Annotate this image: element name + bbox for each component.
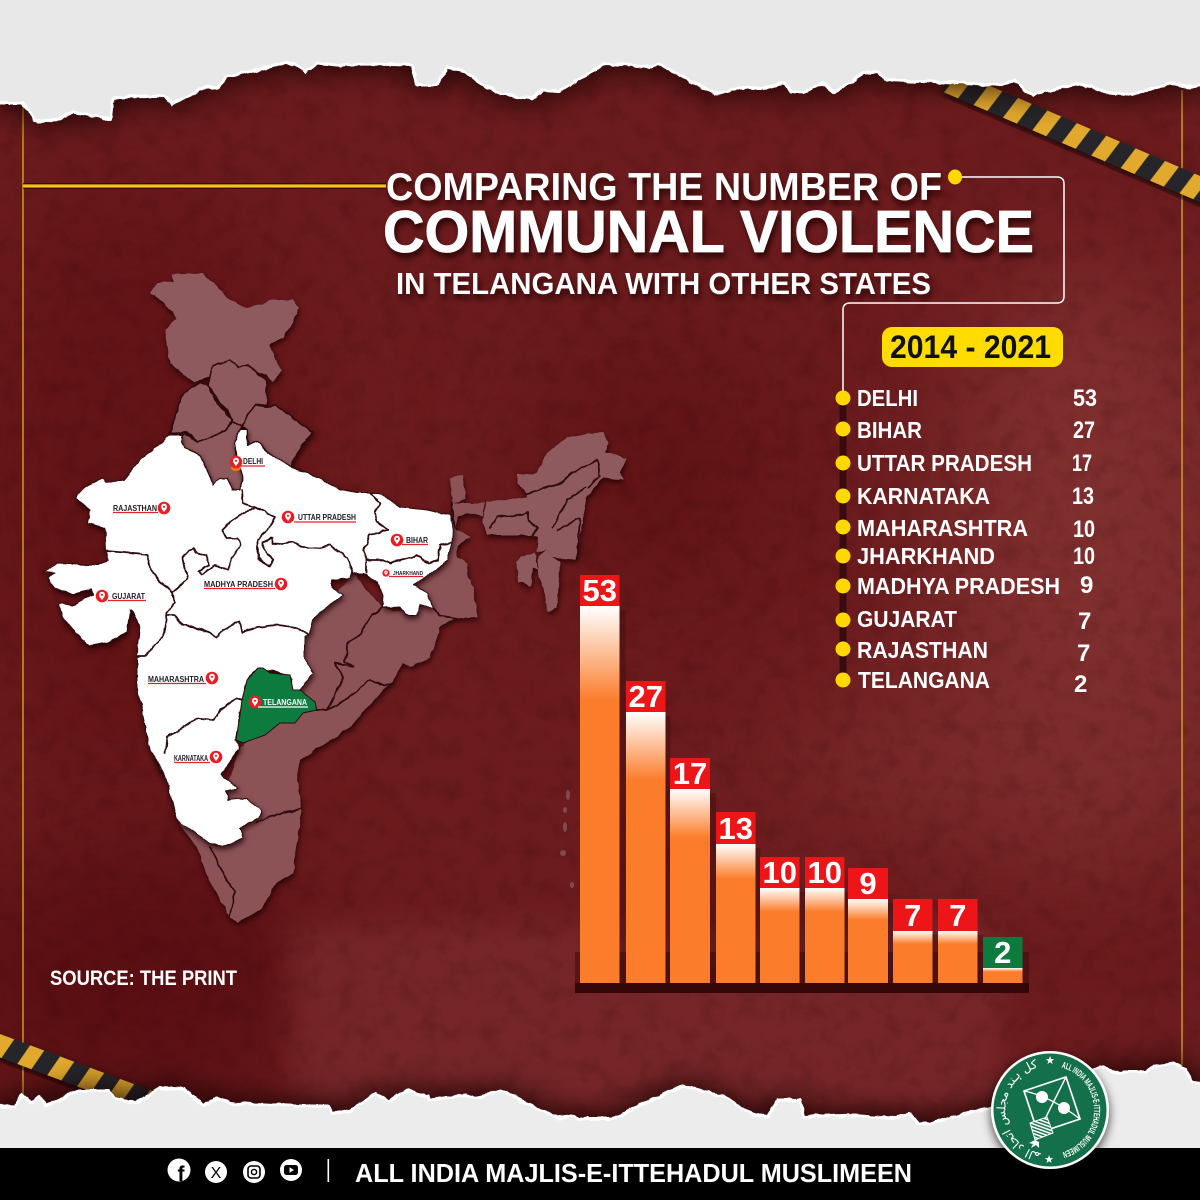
caution tape: top right (943, 70, 1200, 210)
marker: Uttar Pradesh (282, 511, 356, 523)
bar: Karnataka 13: 13 (718, 811, 753, 846)
row: Delhi (836, 385, 1097, 412)
row: Rajasthan (836, 637, 1090, 667)
map: highlighted white states (43, 430, 453, 847)
bar: Maharashtra 10 (760, 855, 800, 983)
row: Gujarat: 7 (1078, 608, 1091, 635)
map of India (43, 273, 627, 922)
caution tape: bottom left (0, 1032, 158, 1114)
logo: kite seal: کل ہند مجلس اتحاد المسلمین (996, 1058, 1041, 1160)
bar: Delhi 53 (580, 573, 620, 983)
row: Rajasthan: RAJASTHAN (857, 637, 988, 663)
connector line (843, 170, 1064, 392)
marker: Gujarat: GUJARAT (112, 592, 145, 601)
state list (836, 385, 1097, 698)
year pill: 2014 - 2021 (890, 329, 1051, 365)
row: Uttar Pradesh: 17 (1072, 450, 1092, 477)
row: Jharkhand: JHARKHAND (857, 543, 995, 569)
row: Gujarat: GUJARAT (857, 606, 957, 632)
chart base plate (575, 952, 1029, 993)
marker: Madhya Pradesh: MADHYA PRADESH (204, 580, 273, 589)
marker: Telangana (249, 696, 308, 708)
icon: x: X (211, 1165, 222, 1182)
map: northern states (150, 273, 312, 490)
map: white state borders (106, 490, 452, 753)
bar: Gujarat 7: 7 (904, 898, 921, 933)
source note: SOURCE: THE PRINT (50, 967, 237, 990)
bar: Gujarat 7 (893, 898, 932, 983)
row: Karnataka: 13 (1072, 483, 1094, 510)
title (383, 166, 1034, 301)
row: Madhya Pradesh: MADHYA PRADESH (857, 573, 1060, 599)
bar: Uttar Pradesh 17 (670, 756, 710, 983)
icon: x (205, 1161, 227, 1183)
marker: Delhi (230, 456, 265, 471)
marker: Jharkhand: JHARKHAND (393, 571, 423, 577)
row: Delhi: DELHI (857, 385, 918, 411)
torn paper: bottom (0, 1063, 1200, 1170)
bar: Jharkhand 10 (805, 855, 844, 983)
map: Telangana highlighted (236, 668, 317, 743)
map: north-east states (483, 432, 627, 612)
map: islands (560, 790, 574, 888)
marker: Gujarat (96, 590, 146, 602)
row: Delhi: 53 (1073, 385, 1097, 412)
logo: kite seal: ALL INDIA MAJLIS-E-ITTEHADUL MUSLIMEEN (1062, 1062, 1100, 1158)
row: Jharkhand: 10 (1073, 543, 1095, 570)
row: Telangana: TELANGANA (858, 667, 990, 693)
footer organisation name: ALL INDIA MAJLIS-E-ITTEHADUL MUSLIMEEN (355, 1158, 912, 1188)
bar: Uttar Pradesh 17: 17 (673, 756, 707, 791)
row: Telangana: 2 (1074, 671, 1087, 698)
bar: Madhya Pradesh 9 (848, 866, 888, 983)
row: Maharashtra: MAHARASHTRA (857, 515, 1028, 541)
row: Jharkhand (836, 543, 1095, 570)
torn paper: top (0, 0, 1200, 122)
row: Bihar: 27 (1073, 417, 1095, 444)
bar: Jharkhand 10: 10 (807, 855, 842, 890)
bar: Telangana 2 (983, 935, 1022, 983)
map: eastern and southern states (153, 432, 627, 922)
marker: Uttar Pradesh: UTTAR PRADESH (298, 513, 356, 522)
row: Telangana (836, 667, 1087, 698)
row: Maharashtra (836, 515, 1095, 543)
marker: Karnataka (174, 751, 222, 763)
row: Maharashtra: 10 (1073, 516, 1095, 543)
row: Bihar: BIHAR (857, 417, 922, 443)
marker: Maharashtra (148, 672, 218, 684)
row: Gujarat (836, 606, 1091, 635)
row: Madhya Pradesh: 9 (1080, 572, 1093, 599)
row: Karnataka (836, 483, 1094, 510)
bar: Telangana 2: 2 (994, 935, 1011, 970)
marker: Maharashtra: MAHARASHTRA (148, 675, 204, 684)
marker: Karnataka: KARNATAKA (174, 754, 208, 763)
bar: Rajasthan 7: 7 (949, 898, 966, 933)
logo: kite seal: ★ (1044, 1154, 1054, 1166)
marker: Telangana: TELANGANA (263, 698, 307, 707)
bar: Maharashtra 10: 10 (762, 855, 797, 890)
bar: Karnataka 13 (716, 811, 756, 983)
row: Karnataka: KARNATAKA (857, 483, 990, 509)
logo: kite seal: ★ (1045, 1055, 1055, 1067)
icon: instagram (243, 1161, 265, 1183)
row: Bihar (836, 417, 1095, 444)
row: Uttar Pradesh: UTTAR PRADESH (857, 450, 1032, 476)
icon: facebook (168, 1158, 190, 1186)
marker: Delhi: DELHI (243, 457, 263, 466)
icon: facebook: f (178, 1163, 186, 1186)
bar chart (575, 573, 1029, 993)
bar: Bihar 27: 27 (628, 679, 663, 714)
marker: Jharkhand (382, 569, 423, 577)
marker: Bihar: BIHAR (406, 536, 428, 545)
footer bar (0, 1148, 1200, 1200)
title line 3: IN TELANGANA WITH OTHER STATES (396, 266, 931, 301)
bar: Delhi 53: 53 (582, 573, 617, 608)
title line 1: COMPARING THE NUMBER OF (386, 166, 942, 209)
marker: Bihar (391, 534, 428, 546)
row: Rajasthan: 7 (1077, 640, 1090, 667)
marker: Madhya Pradesh (204, 578, 287, 590)
title line 2: COMMUNAL VIOLENCE (383, 199, 1034, 265)
marker: Rajasthan: RAJASTHAN (113, 504, 157, 513)
icon: youtube (280, 1159, 302, 1181)
marker: Rajasthan (113, 502, 170, 514)
map: pink state borders (210, 460, 600, 917)
bar: Rajasthan 7 (938, 898, 978, 983)
bar: Bihar 27 (626, 679, 666, 983)
bar: Madhya Pradesh 9: 9 (859, 866, 877, 901)
